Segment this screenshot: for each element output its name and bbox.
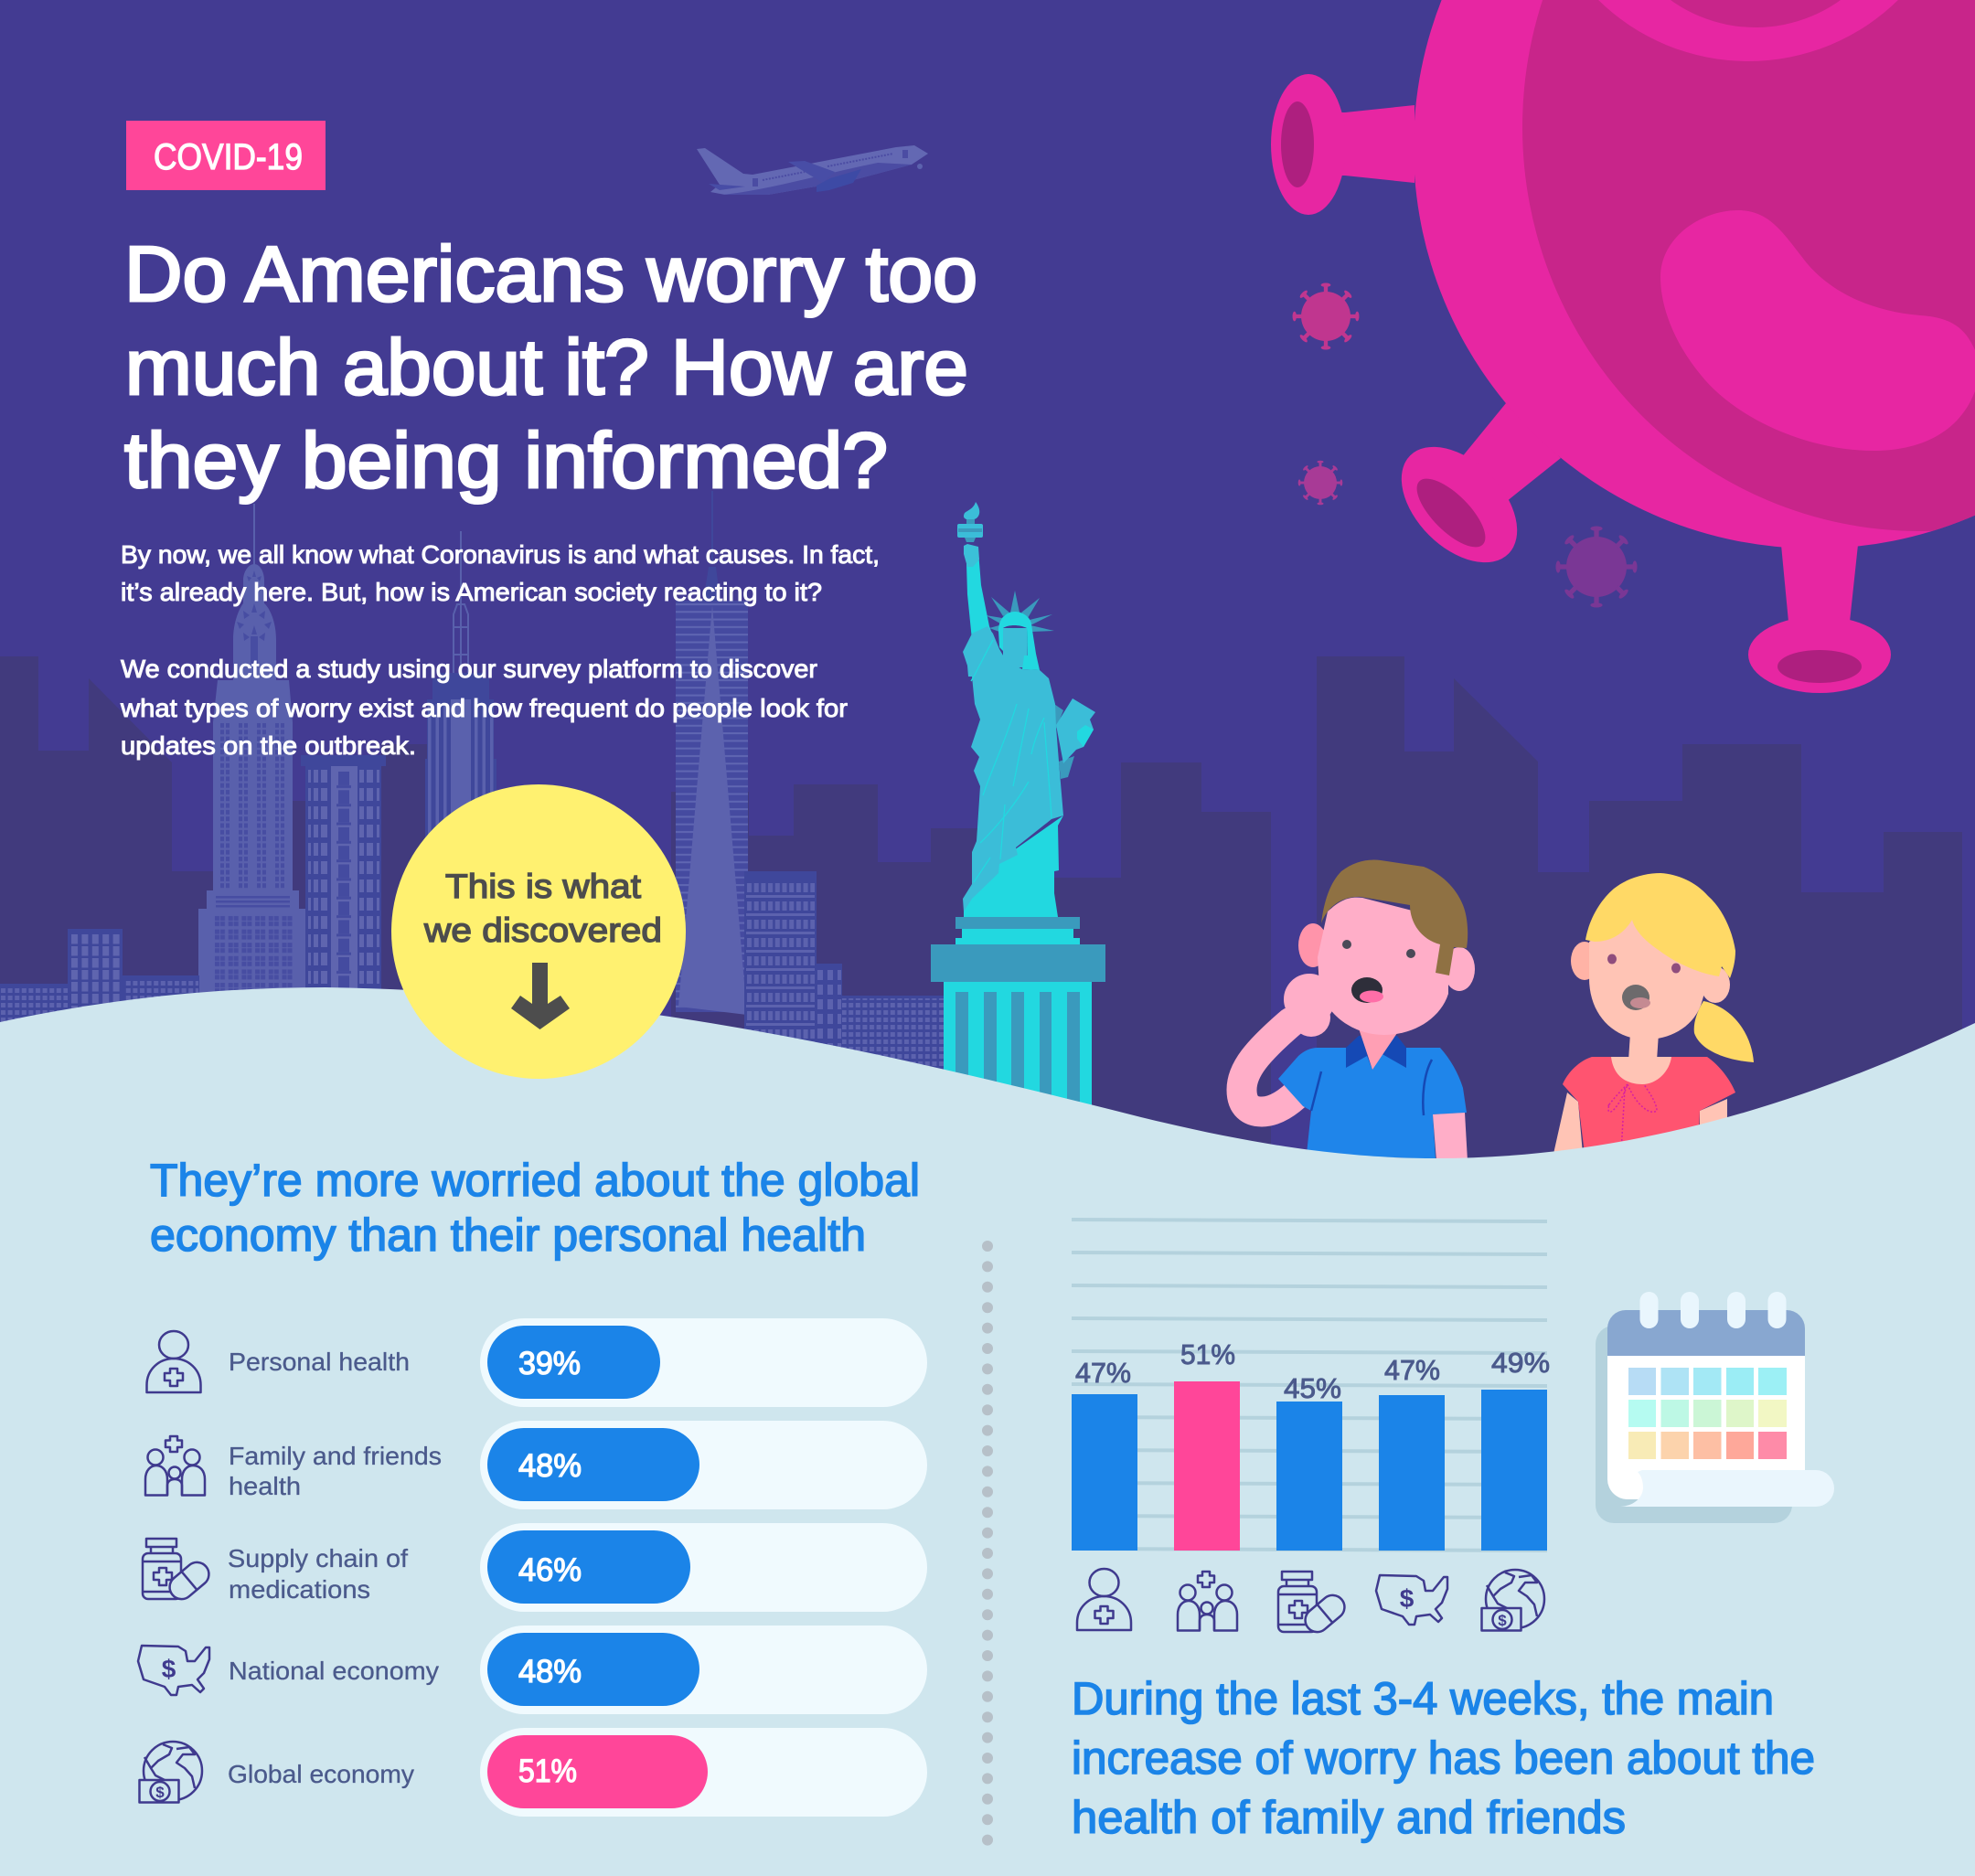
row: family and friends health: Family and friends xyxy=(229,1442,442,1470)
heading: main increase of worry xyxy=(1072,1673,1815,1843)
row: national economy: National economy xyxy=(229,1657,439,1685)
bar: national economy xyxy=(1379,1354,1445,1551)
big virus xyxy=(1271,0,1975,693)
head xyxy=(1003,628,1028,667)
mouth xyxy=(1351,977,1383,1003)
airplane xyxy=(697,145,928,195)
ears xyxy=(1571,942,1598,980)
title: Do Americans worry too xyxy=(124,231,977,318)
bar chart: worry increase xyxy=(1072,1220,1550,1551)
small virus 1 xyxy=(1293,283,1359,349)
low buildings left xyxy=(0,929,199,1029)
row: supply chain of medications: medications xyxy=(229,1575,370,1604)
ears xyxy=(1298,923,1328,967)
icon: family xyxy=(145,1436,205,1496)
torch xyxy=(957,502,983,542)
spike: left xyxy=(1271,74,1415,215)
intro text: updates on the outbreak. xyxy=(121,731,416,760)
hair xyxy=(1321,859,1468,975)
row: supply chain of medications: 46% xyxy=(518,1552,582,1588)
intro text: We conducted a study using our survey platform to discover xyxy=(121,655,817,683)
freedom tower xyxy=(676,491,748,1015)
row: personal health xyxy=(146,1318,927,1407)
chart icon: usa map xyxy=(1376,1575,1447,1625)
row: global economy: Global economy xyxy=(228,1760,414,1788)
icon: person with cross xyxy=(146,1331,201,1392)
fist xyxy=(1284,974,1335,1037)
arms xyxy=(1553,1093,1727,1154)
dotted divider xyxy=(982,1246,993,1860)
intro text: it’s already here. But, how is American society reacting to it? xyxy=(121,578,822,606)
intro text: By now, we all know what Coronavirus is and what causes. In fact, xyxy=(121,540,880,569)
blouse xyxy=(1563,1057,1735,1154)
lower skirt xyxy=(964,815,1063,917)
lower panel wave xyxy=(0,987,1975,1876)
heading: main increase of worry: During the last 3-4 weeks, the main xyxy=(1072,1673,1774,1724)
row: family and friends health: health xyxy=(229,1472,301,1500)
hair and crown band xyxy=(998,612,1040,670)
badge: COVID-19 xyxy=(126,121,326,190)
chart icon: globe: $ xyxy=(1498,1612,1507,1629)
hair xyxy=(1585,873,1735,978)
heading: main increase of worry: health of family and friends xyxy=(1072,1792,1626,1843)
row: personal health: 39% xyxy=(518,1346,581,1381)
row: supply chain of medications xyxy=(143,1523,927,1612)
spike: bottom xyxy=(1748,545,1891,693)
icon: globe with money xyxy=(139,1742,202,1803)
icon: usa map: $ xyxy=(162,1655,176,1683)
badge: COVID-19: COVID-19 xyxy=(154,137,303,177)
empire state building xyxy=(425,531,496,923)
bar: supply chain xyxy=(1276,1372,1342,1551)
chart icon: person xyxy=(1077,1569,1131,1630)
robe xyxy=(963,626,1063,911)
eyes xyxy=(1342,940,1415,958)
bar: personal health xyxy=(1072,1357,1137,1551)
icon: globe with money: $ xyxy=(155,1784,165,1801)
icon: calendar xyxy=(1596,1292,1834,1523)
callout: this is what we discovered xyxy=(391,784,686,1079)
bow xyxy=(1608,1084,1657,1152)
row: global economy xyxy=(139,1728,927,1817)
row: family and friends health xyxy=(145,1421,927,1509)
icon: usa map xyxy=(138,1646,209,1695)
chart icon: family xyxy=(1178,1572,1237,1631)
statue of liberty pedestal xyxy=(931,917,1105,1146)
tablet shadow xyxy=(1052,702,1074,779)
bar: national economy: 47% xyxy=(1384,1354,1440,1386)
row: national economy xyxy=(138,1626,927,1714)
intro text: what types of worry exist and how frequent do people look for xyxy=(120,694,848,722)
apartment tower xyxy=(301,755,386,1022)
row: personal health: Personal health xyxy=(229,1348,410,1376)
neck xyxy=(1628,1033,1659,1061)
bar: supply chain: 45% xyxy=(1284,1372,1341,1404)
row: national economy: 48% xyxy=(518,1654,582,1689)
title xyxy=(124,231,977,505)
mouth xyxy=(1622,985,1650,1010)
icon: medication xyxy=(143,1539,214,1604)
tablet xyxy=(1056,698,1095,763)
small virus 3 xyxy=(1555,526,1638,608)
heading: main increase of worry: increase of worry has been about the xyxy=(1072,1732,1815,1784)
boy character xyxy=(1242,859,1475,1161)
bar: global economy: 49% xyxy=(1491,1347,1550,1379)
statue of liberty figure xyxy=(957,502,1095,917)
chrysler building xyxy=(198,504,307,1024)
crown rays xyxy=(986,591,1054,632)
collar xyxy=(1346,1036,1406,1070)
small virus 2 xyxy=(1298,461,1342,505)
bar: global economy xyxy=(1481,1347,1550,1551)
neck xyxy=(1359,1029,1397,1070)
intro text xyxy=(120,540,880,760)
arrow xyxy=(511,963,570,1029)
row: global economy: 51% xyxy=(518,1753,577,1789)
low buildings right xyxy=(744,871,945,1078)
raised arm xyxy=(966,551,992,640)
title: much about it? How are xyxy=(125,325,968,411)
heading: global economy worry xyxy=(150,1155,920,1261)
spike: lower left xyxy=(1380,403,1561,584)
bar: personal health: 47% xyxy=(1075,1357,1131,1389)
chart icon: medication xyxy=(1278,1572,1350,1636)
ponytail xyxy=(1694,1001,1754,1062)
head xyxy=(1589,914,1712,1039)
heading: global economy worry: They’re more worried about the global xyxy=(150,1155,920,1206)
row: family and friends health: 48% xyxy=(518,1448,582,1484)
chart icon: usa map: $ xyxy=(1400,1584,1415,1613)
shirt xyxy=(1278,1048,1467,1159)
heading: global economy worry: economy than their personal health xyxy=(150,1210,866,1261)
eyes xyxy=(1607,954,1681,973)
arm xyxy=(1242,1022,1298,1112)
chart icon: globe xyxy=(1481,1570,1544,1631)
robe folds xyxy=(971,640,1052,882)
virus body xyxy=(1414,0,1975,549)
row: supply chain of medications: Supply chain of xyxy=(228,1544,408,1572)
callout: this is what we discovered: we discovered xyxy=(423,911,662,949)
skyline silhouette xyxy=(0,656,1962,1188)
title: they being informed? xyxy=(124,418,888,505)
girl character xyxy=(1553,873,1754,1154)
head xyxy=(1318,898,1448,1035)
bar: family and friends: 51% xyxy=(1180,1338,1235,1370)
bar: family and friends xyxy=(1174,1338,1240,1551)
callout: this is what we discovered: This is what xyxy=(445,868,642,905)
